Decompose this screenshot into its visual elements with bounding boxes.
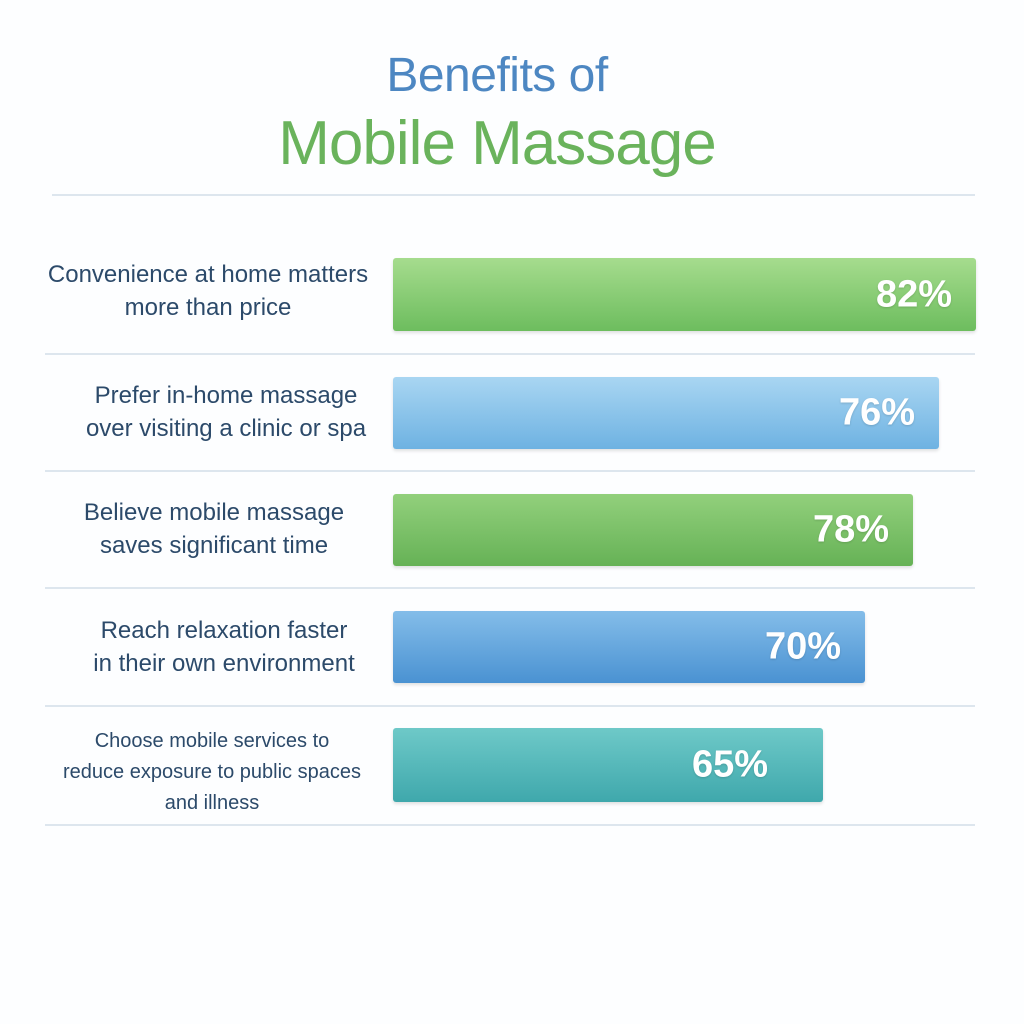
row 1 label: more than price bbox=[125, 294, 291, 321]
row 5 label: reduce exposure to public spaces bbox=[63, 761, 361, 783]
title line 1: Benefits of bbox=[386, 49, 608, 102]
row 2 bar: 76% bbox=[839, 392, 915, 434]
row 1 label: Convenience at home matters bbox=[48, 261, 368, 288]
row 2 label: over visiting a clinic or spa bbox=[86, 415, 366, 442]
row 3 label bbox=[84, 499, 344, 559]
title bbox=[278, 49, 716, 178]
row 1 bar: 82% bbox=[876, 273, 952, 315]
row 5 label: and illness bbox=[165, 792, 259, 814]
row 2 label bbox=[86, 382, 366, 442]
row 4 label bbox=[93, 617, 355, 677]
row 1 label bbox=[48, 261, 368, 321]
row 5 label bbox=[63, 730, 361, 814]
row 1 bar bbox=[393, 258, 976, 331]
row 5 label: Choose mobile services to bbox=[95, 730, 329, 752]
title line 2: Mobile Massage bbox=[278, 109, 716, 178]
row 5 bar: 65% bbox=[692, 744, 768, 786]
row 5 bar bbox=[393, 728, 823, 802]
row 3 label: Believe mobile massage bbox=[84, 499, 344, 526]
row 4 bar bbox=[393, 611, 865, 683]
row 4 label: in their own environment bbox=[93, 650, 355, 677]
row 2 label: Prefer in-home massage bbox=[95, 382, 357, 409]
row 3 label: saves significant time bbox=[100, 532, 328, 559]
row 3 bar: 78% bbox=[813, 508, 889, 550]
row 4 bar: 70% bbox=[765, 626, 841, 668]
row 4 label: Reach relaxation faster bbox=[101, 617, 347, 644]
row 3 bar bbox=[393, 494, 913, 566]
row 2 bar bbox=[393, 377, 939, 449]
